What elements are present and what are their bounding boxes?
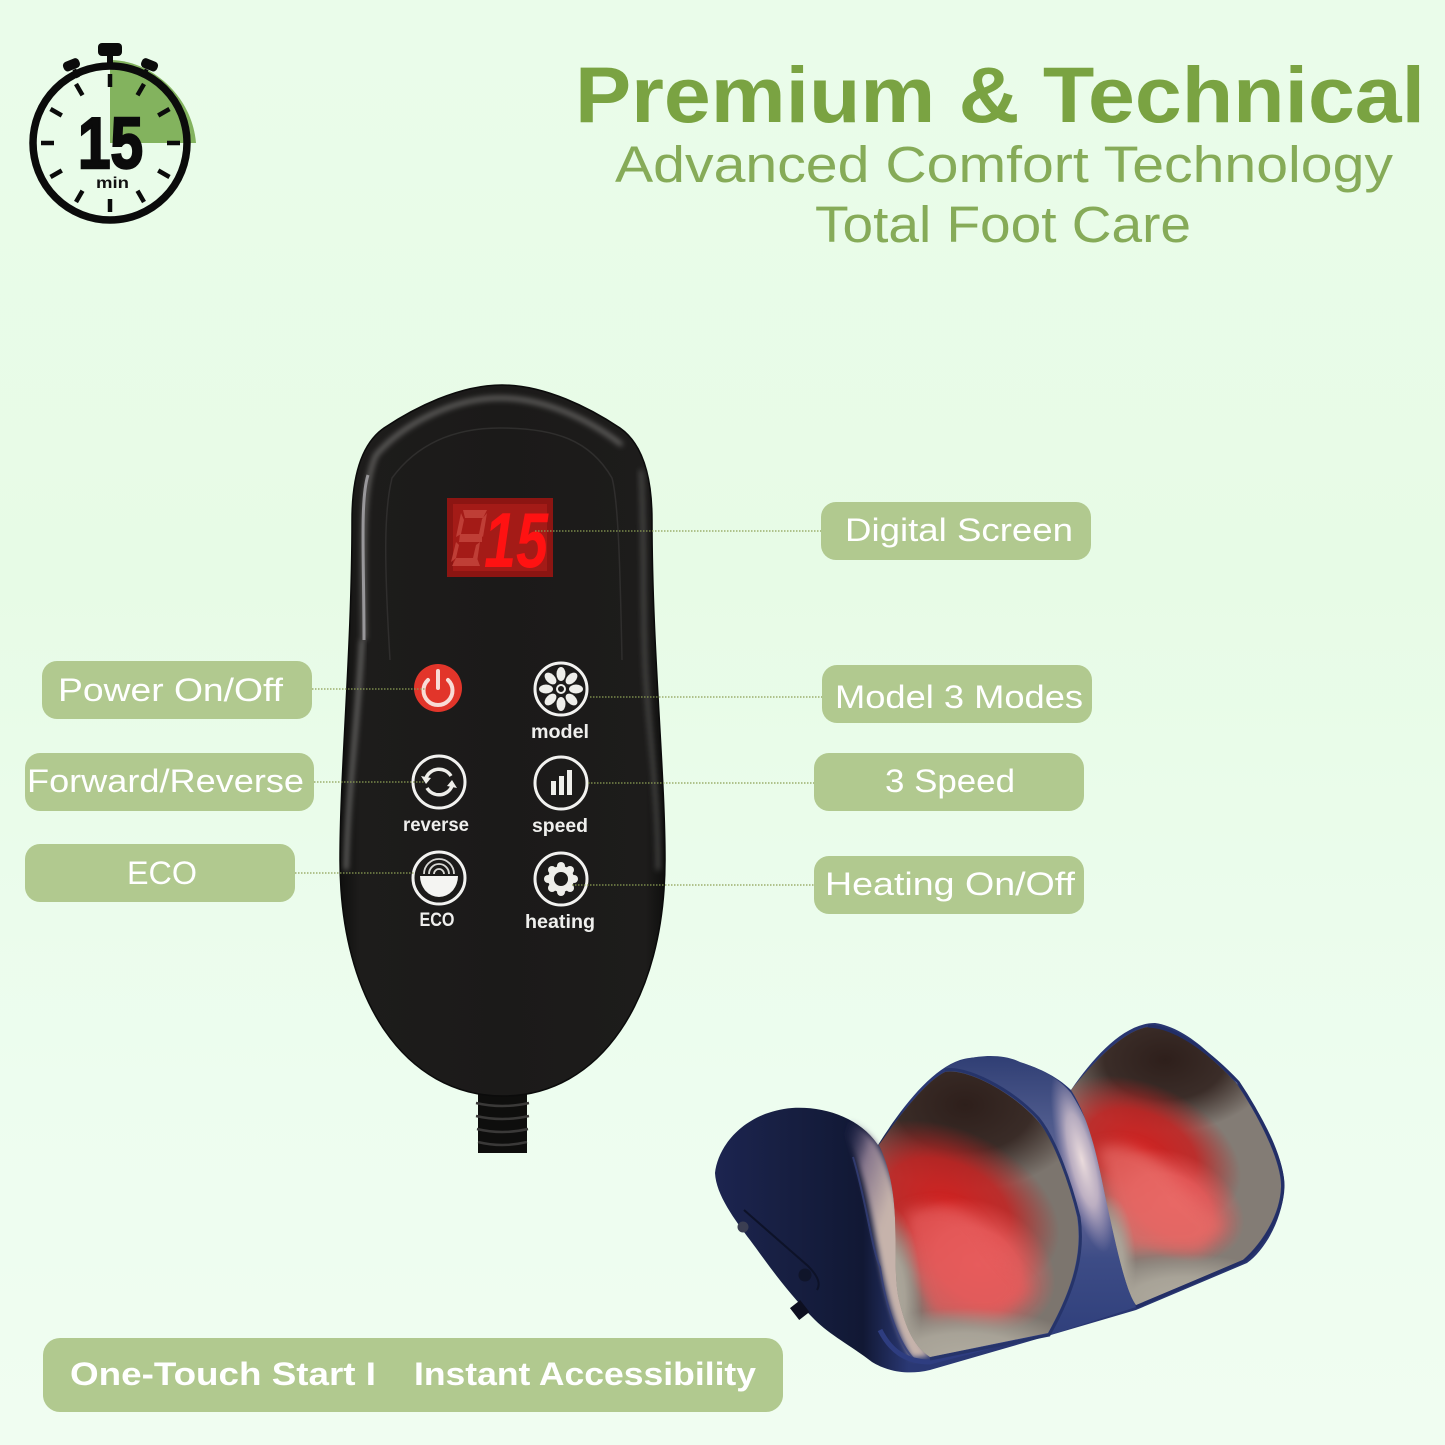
massager body (715, 1023, 1284, 1372)
button: reverse (413, 756, 465, 808)
button: power (414, 664, 462, 712)
remote control (340, 385, 665, 1153)
label: speed: speed (532, 816, 588, 837)
label: Digital Screen (821, 502, 1091, 560)
label: ECO: ECO (420, 910, 454, 931)
digital display (447, 496, 553, 584)
side button slot (744, 1210, 819, 1290)
button: model (535, 663, 587, 715)
subheading line 2: Total Foot Care (815, 196, 1191, 253)
label: Heating On/Off (814, 856, 1084, 914)
label: Model 3 Modes: Model 3 Modes (835, 679, 1083, 715)
bottom banner: Instant Accessibility (414, 1356, 756, 1392)
label: Forward/Reverse (25, 753, 314, 811)
left side panel shading (815, 1110, 930, 1358)
label: Forward/Reverse: Forward/Reverse (27, 763, 304, 799)
button: heating (535, 853, 587, 905)
label: model: model (531, 722, 589, 743)
cable (476, 1090, 529, 1153)
label: Power On/Off (42, 661, 312, 719)
icon: 15 minute stopwatch: 15 (78, 104, 143, 184)
label: 3 Speed: 3 Speed (885, 763, 1015, 799)
label: 3 Speed (814, 753, 1084, 811)
lower body trim (880, 1330, 1044, 1362)
label: Model 3 Modes (822, 665, 1092, 723)
side controls (738, 1222, 812, 1320)
label: Digital Screen: Digital Screen (845, 512, 1073, 548)
subheading line 1: Advanced Comfort Technology (615, 136, 1394, 193)
button: speed (535, 757, 587, 809)
bottom banner (43, 1338, 783, 1412)
remote body (340, 385, 665, 1096)
label: Heating On/Off: Heating On/Off (825, 866, 1075, 902)
icon: 15 minute stopwatch: min (96, 175, 129, 192)
pad trim lines (930, 1070, 1080, 1359)
digital display: 15 (484, 496, 549, 584)
title (575, 50, 1425, 253)
icon: 15 minute stopwatch (33, 43, 196, 220)
label: Power On/Off: Power On/Off (58, 672, 283, 708)
label: reverse: reverse (403, 815, 469, 836)
heading: Premium & Technical (575, 50, 1425, 139)
button: ECO (413, 852, 465, 904)
centre band (940, 1050, 1140, 1340)
label: ECO (25, 844, 295, 902)
label: ECO: ECO (127, 855, 197, 891)
foot massager (715, 1023, 1285, 1372)
heat pad: front (879, 1072, 1078, 1357)
bottom banner: One-Touch Start I (70, 1356, 376, 1392)
label: heating: heating (525, 912, 595, 933)
heat pad: rear (1071, 1027, 1281, 1305)
